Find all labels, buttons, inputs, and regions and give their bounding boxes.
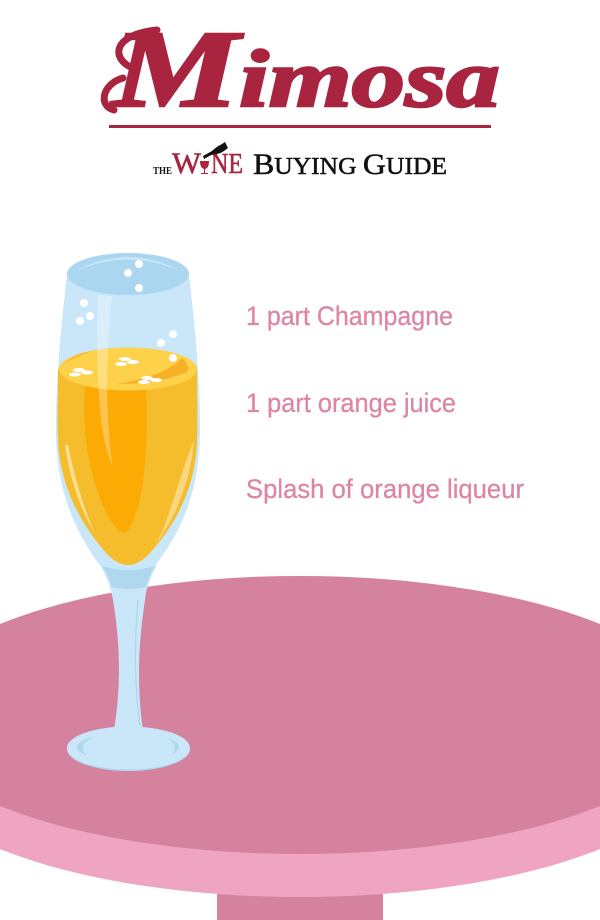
- icon: wine bottle pouring into glass: [200, 142, 228, 174]
- ingredient: orange liqueur: Splash of orange liqueur: [246, 474, 524, 504]
- glass base: [67, 726, 190, 771]
- ingredient list: [246, 301, 524, 504]
- logo: The Wine Buying Guide: W: [172, 147, 202, 180]
- logo: The Wine Buying Guide: THE: [153, 165, 172, 177]
- glass stem: [100, 565, 157, 730]
- bubbles: [76, 260, 177, 362]
- bowl foot shading: [102, 566, 155, 589]
- logo: The Wine Buying Guide: NE: [211, 149, 243, 180]
- title underline: [109, 125, 491, 128]
- glass bowl: [56, 274, 200, 577]
- orange juice: [58, 348, 197, 565]
- champagne glass: [56, 253, 200, 771]
- ingredient: orange juice: 1 part orange juice: [246, 388, 456, 418]
- title: Mimosa: [110, 8, 500, 130]
- table: [0, 576, 600, 920]
- glass highlights: [65, 295, 194, 545]
- rim opening: [67, 253, 189, 295]
- ingredient: champagne: 1 part Champagne: [246, 301, 453, 331]
- logo: The Wine Buying Guide: BUYING GUIDE: [253, 148, 447, 181]
- foam on juice surface: [69, 357, 162, 384]
- logo: The Wine Buying Guide: [153, 142, 447, 181]
